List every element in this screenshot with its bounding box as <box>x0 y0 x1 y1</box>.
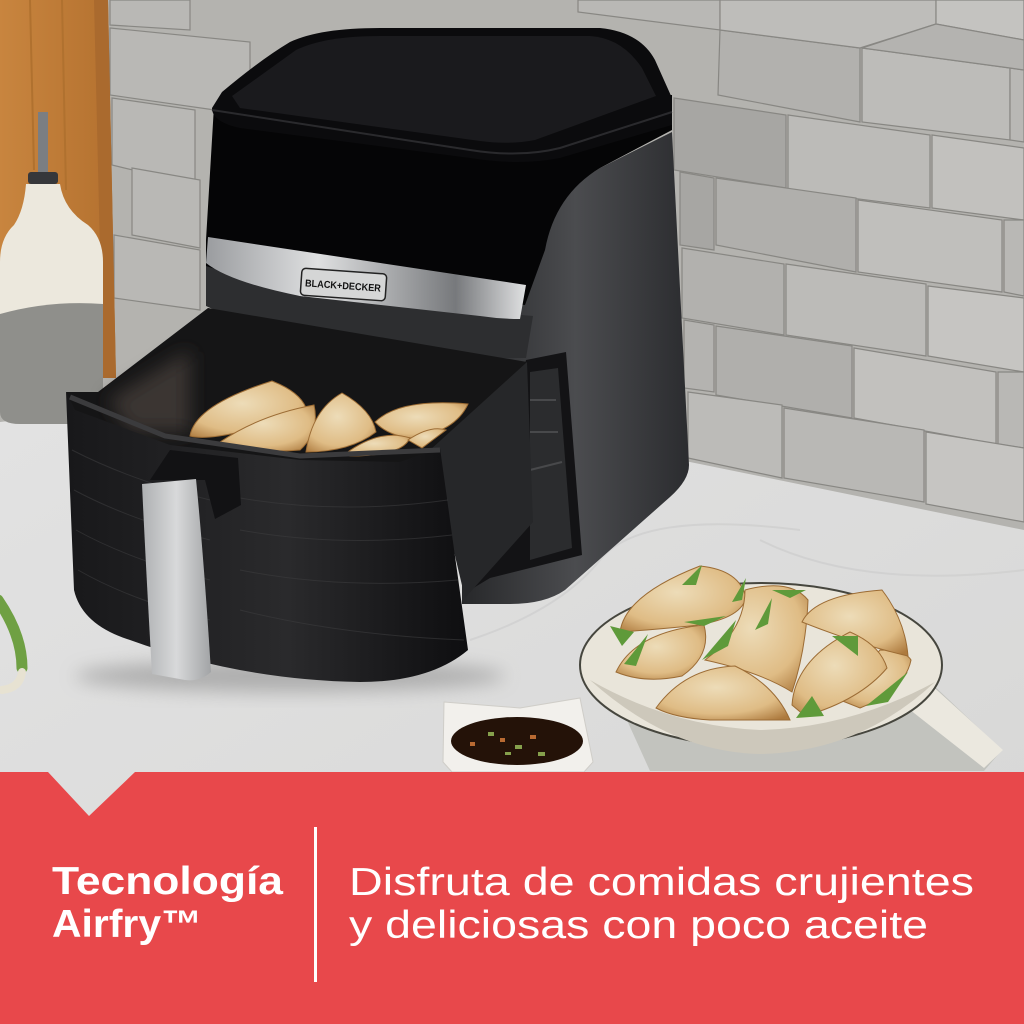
side opening <box>470 352 582 590</box>
heading: Tecnología <box>52 860 284 903</box>
lower band <box>206 266 533 358</box>
plate of dumplings <box>580 565 942 754</box>
banner: Airfry™ <box>52 903 202 946</box>
air fryer <box>66 28 689 692</box>
lid <box>212 28 672 162</box>
bottle <box>0 112 103 424</box>
marble veins <box>470 524 1024 640</box>
shadow <box>75 660 505 692</box>
fryer body <box>462 132 689 604</box>
banner <box>0 772 1024 1024</box>
logo <box>300 268 387 301</box>
handle neck <box>150 450 241 519</box>
countertop <box>0 410 1024 1024</box>
scallions <box>610 565 908 718</box>
sauce dish <box>443 698 593 772</box>
silver trim <box>206 237 526 319</box>
basket side wall <box>430 362 533 598</box>
towel <box>616 682 1003 771</box>
black upper body <box>206 95 672 305</box>
logo: BLACK+DECKER <box>305 278 382 295</box>
plated dumplings <box>616 566 911 720</box>
banner: y deliciosas con poco aceite <box>349 904 928 947</box>
basket interior <box>66 308 527 468</box>
basket front <box>66 392 468 682</box>
scallion at left <box>0 600 22 690</box>
description: Disfruta de comidas crujientes <box>349 861 974 904</box>
cutting board <box>0 0 116 378</box>
handle <box>142 479 211 680</box>
dumplings in basket <box>190 381 468 456</box>
wall: stone bricks <box>0 0 1024 540</box>
